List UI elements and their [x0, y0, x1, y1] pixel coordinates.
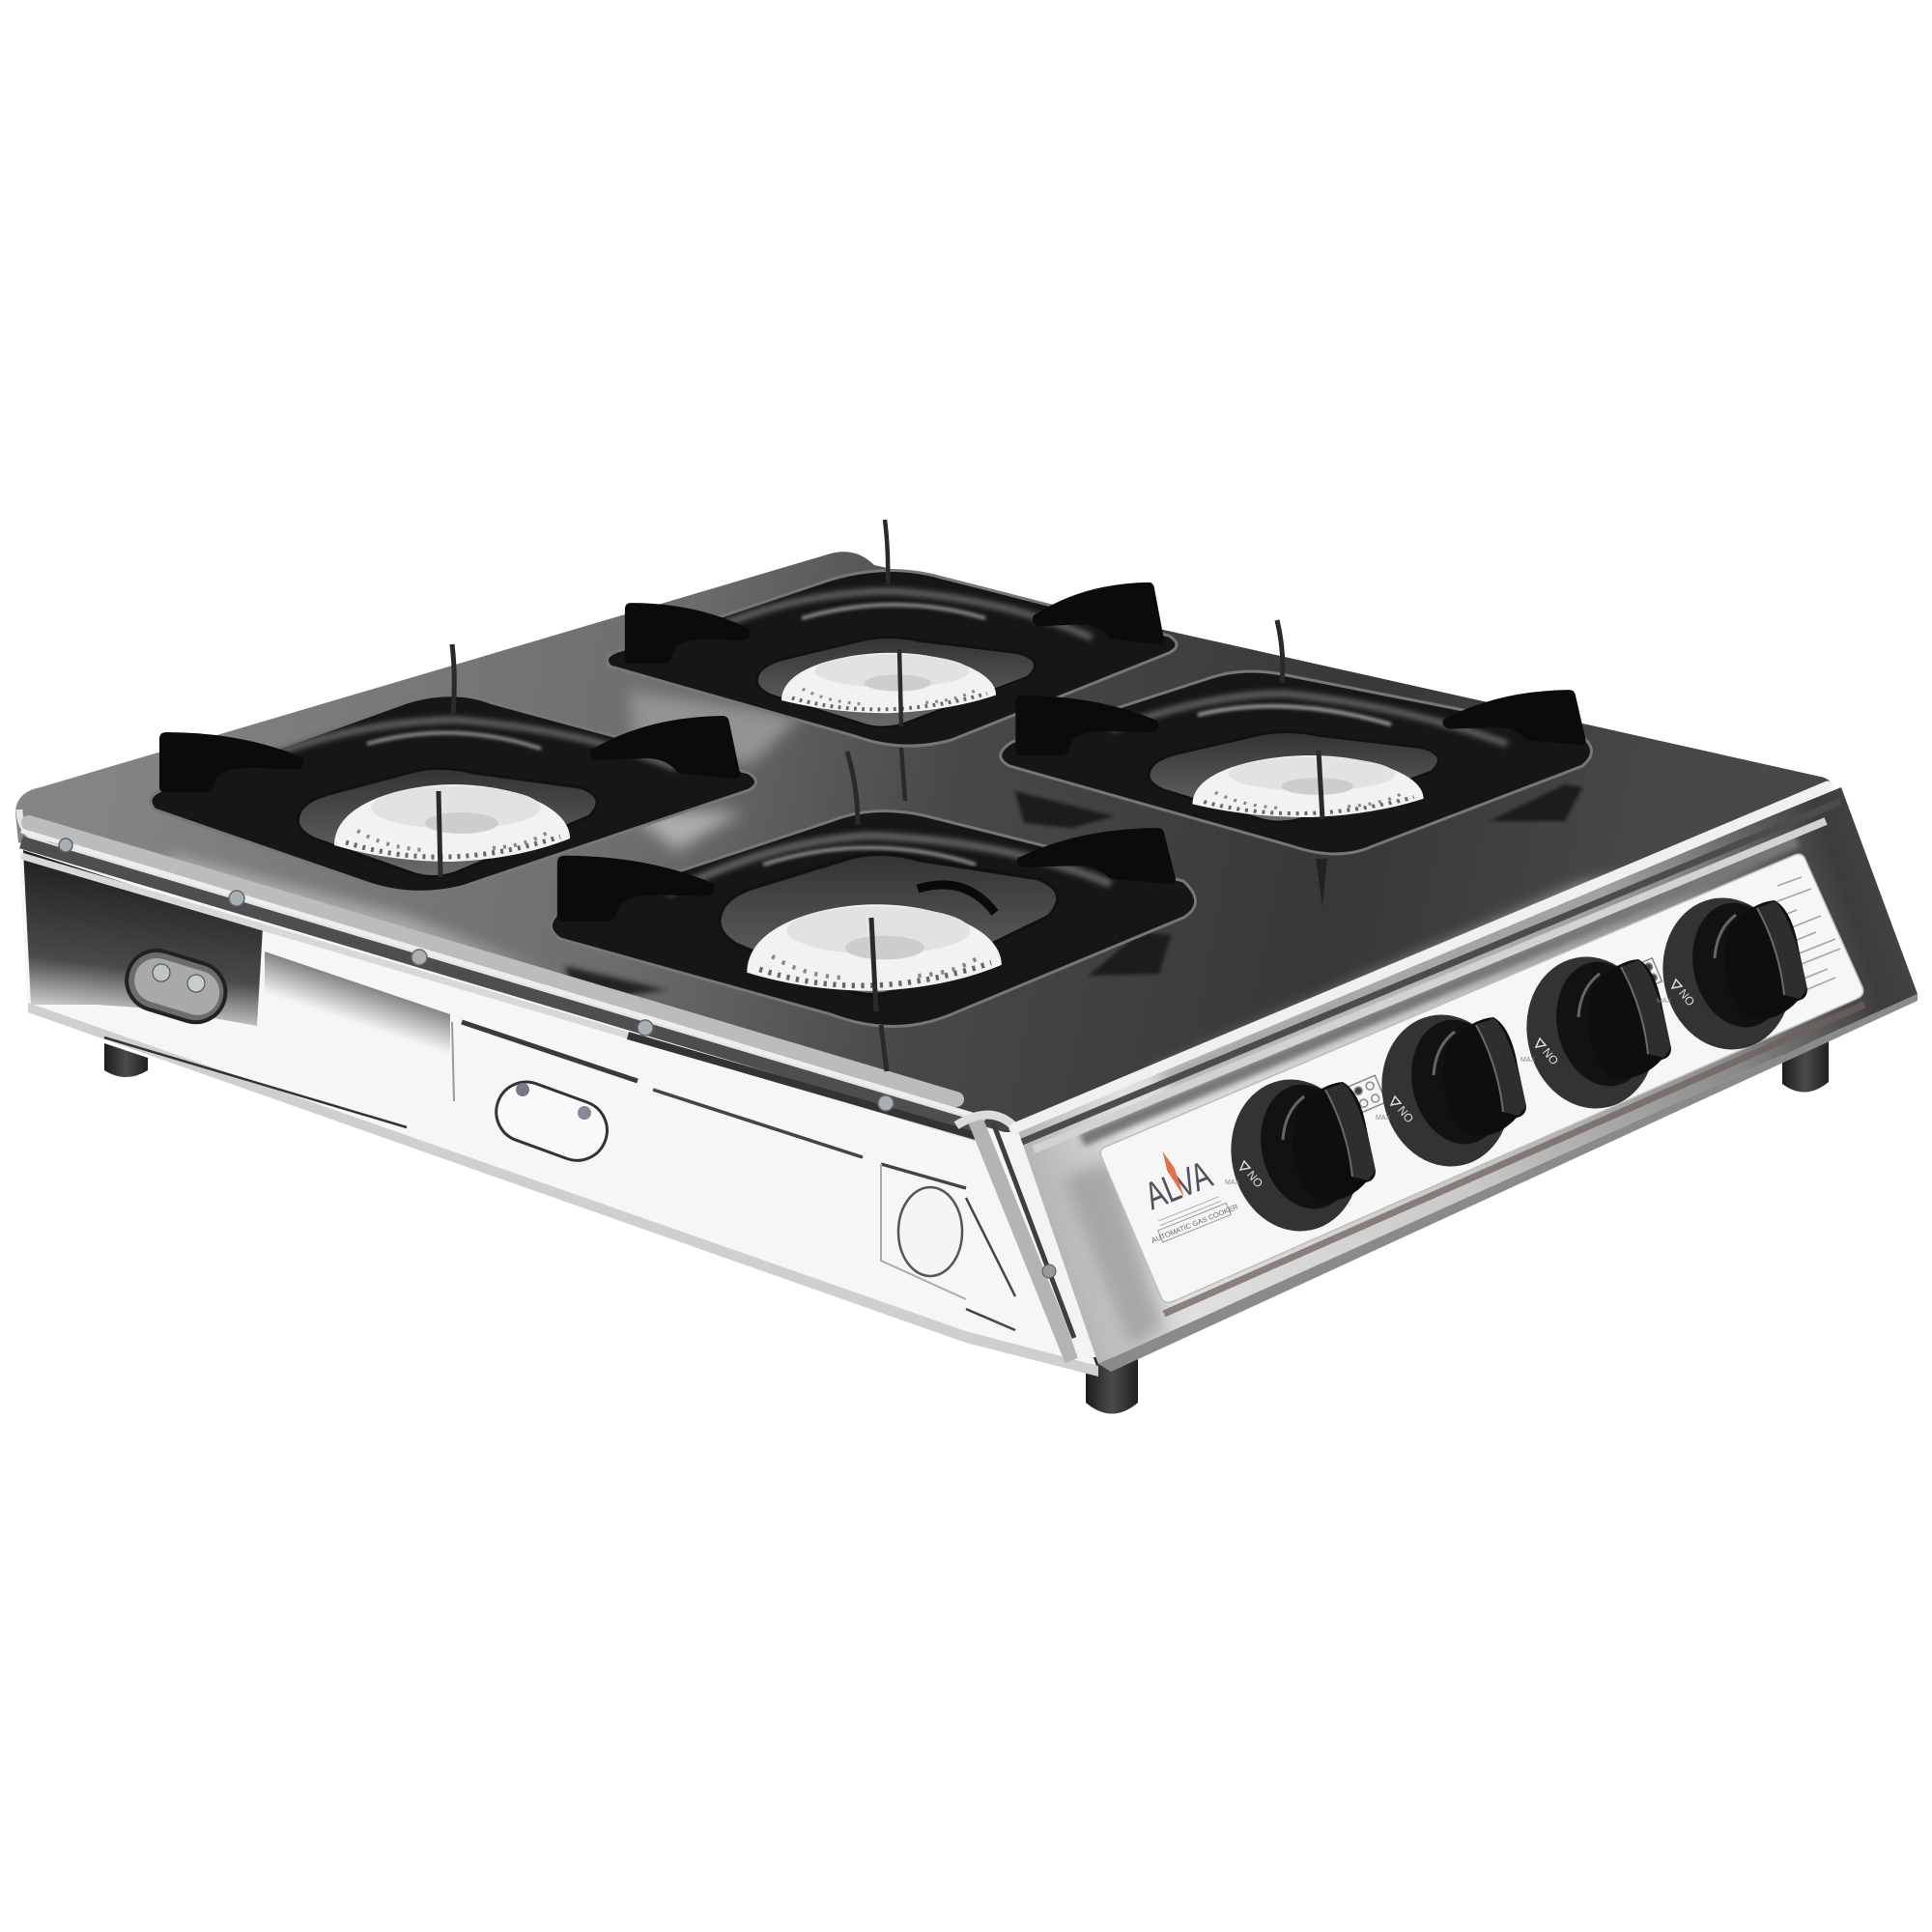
corner bracket: [956, 1115, 1087, 1360]
knob 2: MAX: [1376, 1115, 1391, 1122]
knob 1: MAX: [1225, 1179, 1240, 1186]
pan 2: [607, 570, 1177, 746]
foot: right: [1782, 1038, 1829, 1093]
instruction plate: [1100, 854, 1863, 1302]
burner layout icon 2: [1629, 958, 1662, 991]
supports 4: [557, 828, 1176, 922]
pins 2: [885, 520, 905, 801]
logo ALVA: ALVA: [1139, 1153, 1218, 1218]
burner 1: left: [151, 644, 755, 892]
pan 4: [551, 811, 1196, 1026]
burner head 4: [747, 904, 1002, 991]
embossed circle: [898, 1187, 962, 1276]
knob 4: MAX: [1657, 998, 1671, 1005]
pins 1: [439, 644, 454, 877]
burner 2: back: [607, 520, 1177, 801]
rail: front edge: [1014, 786, 1840, 1150]
pins 4: [847, 752, 887, 1071]
rail: left edge with screws: [19, 810, 985, 1138]
pan 1: [151, 696, 755, 892]
supports 3: [1015, 690, 1586, 755]
foot: front: [1086, 1357, 1138, 1414]
embossed oval left: [120, 943, 233, 1030]
burner head 2: [781, 653, 996, 713]
logo ALVA: AUTOMATIC GAS COOKER: [1151, 1202, 1240, 1245]
knob 2: ON: [1395, 1103, 1416, 1125]
screw row: [59, 838, 894, 1111]
supports 1: [159, 716, 740, 792]
pins 3: [1277, 620, 1322, 819]
knob 1: [1217, 1067, 1376, 1243]
cooktop deck: [15, 552, 1832, 1132]
knob 2: [1368, 1003, 1526, 1179]
burner 4: front: [551, 752, 1196, 1071]
knob 3: [1513, 945, 1671, 1121]
burner layout icon 1: [1349, 1075, 1386, 1114]
foot: left: [104, 1043, 148, 1077]
side panel: [18, 840, 1098, 1377]
burner head 1: [334, 784, 570, 862]
knob 3: MAX: [1520, 1057, 1536, 1064]
knob 4: ON: [1676, 986, 1697, 1009]
front control frame: [1012, 787, 1918, 1372]
embossed oval middle: [488, 1073, 615, 1169]
burner head 3: [1192, 755, 1424, 817]
knob 1: ON: [1244, 1168, 1265, 1190]
burner 3: right: [1001, 620, 1591, 907]
pan 3: [1001, 671, 1591, 854]
supports 2: [625, 582, 1164, 664]
instruction text lines: [1777, 877, 1840, 993]
knob 4: [1649, 886, 1807, 1062]
logo ALVA: [1122, 1133, 1240, 1246]
knob 3: ON: [1540, 1045, 1561, 1067]
